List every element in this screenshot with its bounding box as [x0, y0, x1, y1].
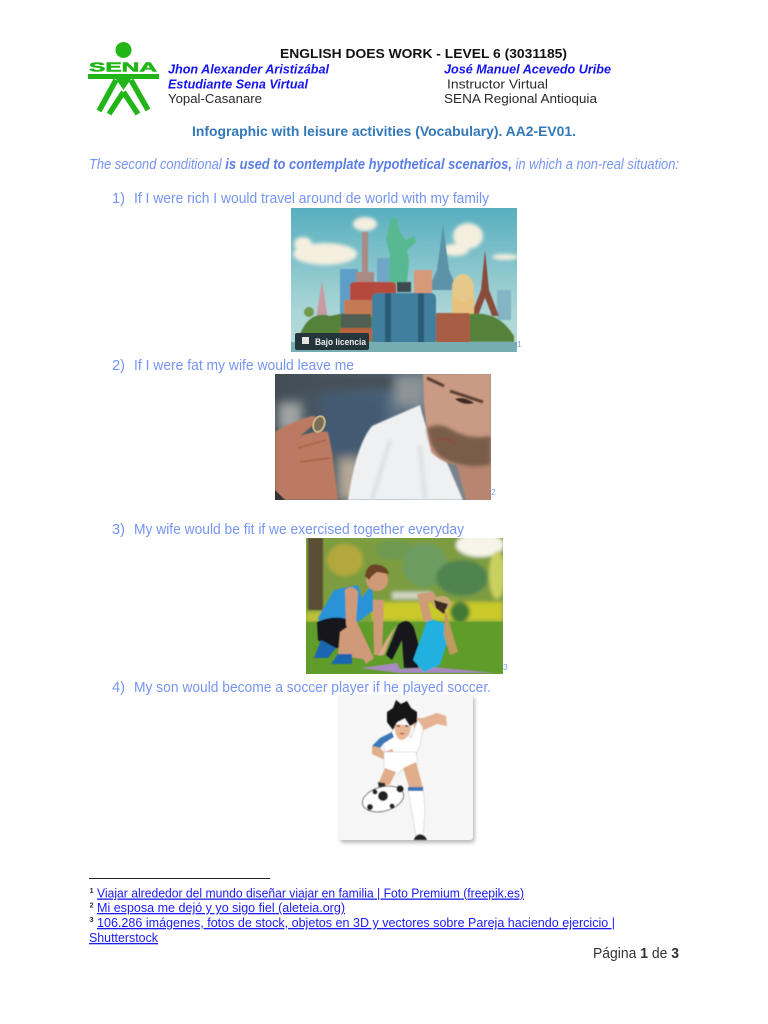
badge: licence label: Bajo licencia [315, 337, 367, 348]
footnotes [89, 886, 615, 945]
image: man looking at wedding ring [275, 374, 491, 500]
footnote mark 3: 3 [503, 662, 508, 672]
footnote 3: 106.286 imágenes, fotos de stock, objetos en 3D y vectores sobre Pareja haciendo ejercicio | [97, 915, 615, 930]
student details: Yopal-Casanare [168, 91, 262, 106]
instructor details: SENA Regional Antioquia [444, 91, 598, 106]
student details: Estudiante Sena Virtual [168, 76, 308, 92]
badge: licence label [295, 333, 369, 350]
heading: Infographic with leisure activities (Vocabulary). AA2-EV01. [192, 124, 576, 139]
footnote 1: Viajar alrededor del mundo diseñar viajar en familia | Foto Premium (freepik.es) [97, 886, 524, 900]
sentence 2: If I were fat my wife would leave me [134, 357, 354, 374]
sentence 2: 2) [112, 357, 125, 374]
footnote rule [89, 878, 270, 879]
image: cartoon soccer player [338, 695, 475, 843]
intro sentence: The second conditional is used to contemplate hypothetical scenarios, in which a non-real situation: [89, 157, 679, 173]
footnote 1: 1 [90, 886, 94, 895]
page [88, 42, 678, 961]
sentence 3: 3) [112, 521, 125, 538]
footnote 3: Shutterstock [89, 930, 158, 945]
instructor details: Instructor Virtual [447, 76, 548, 92]
sentence 4: My son would become a soccer player if he played soccer. [134, 679, 491, 696]
footnote mark 1: 1 [517, 339, 522, 349]
instructor details [444, 62, 612, 106]
footnote 2: Mi esposa me dejó y yo sigo fiel (aleteia.org) [97, 900, 345, 915]
sentence 3: My wife would be fit if we exercised together everyday [134, 521, 464, 538]
student details [168, 62, 329, 106]
footnote 3 [89, 915, 615, 945]
instructor details: José Manuel Acevedo Uribe [444, 62, 612, 76]
sentence 1: 1) [112, 190, 125, 207]
sentence 4: 4) [112, 679, 125, 696]
image: couple exercising in the park [306, 533, 505, 674]
footnote mark 2: 2 [491, 487, 496, 497]
header title: ENGLISH DOES WORK - LEVEL 6 (3031185) [280, 46, 567, 61]
icon: SENA logo [88, 42, 159, 114]
student details: Jhon Alexander Aristizábal [168, 62, 329, 76]
footnote 2: 2 [90, 900, 94, 910]
sentence 1: If I were rich I would travel around de world with my family [134, 190, 489, 207]
icon: SENA logo: SENA [89, 60, 158, 74]
footnote 3: 3 [90, 915, 94, 924]
image: travel landmarks and suitcases [291, 208, 518, 352]
page number: Página 1 de 3 [593, 946, 679, 962]
